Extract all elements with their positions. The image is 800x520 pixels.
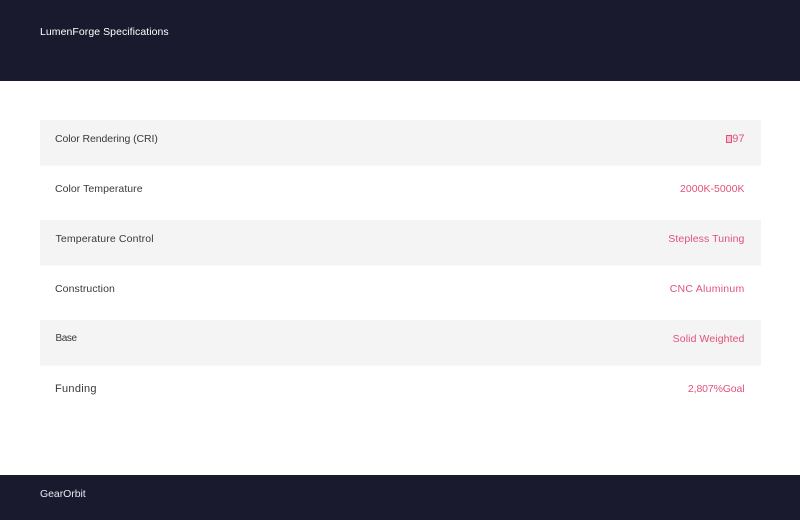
label: Funding [55,383,97,395]
row: Temperature Control [40,220,761,265]
row: Construction [55,283,744,295]
value: 2000K-5000K [680,183,744,195]
row: Funding [55,383,744,395]
value [726,133,744,145]
label: Construction [55,283,115,295]
label: Temperature Control [56,233,154,245]
row: Color Rendering [40,120,761,165]
value: 97 [732,133,744,145]
value: Solid Weighted [673,333,744,345]
row: Color Temperature [55,183,744,195]
title: LumenForge Specifications [40,26,169,38]
row: Base [40,320,761,365]
header band [0,0,800,81]
value: 2,807% Goal [688,383,744,395]
footer band [0,475,800,520]
value: Stepless Tuning [668,233,744,245]
footer brand: GearOrbit [40,488,86,500]
label: Base [56,333,77,344]
label: Color Temperature [55,183,143,195]
label: Color Rendering (CRI) [55,133,158,145]
value: CNC Aluminum [670,283,744,295]
